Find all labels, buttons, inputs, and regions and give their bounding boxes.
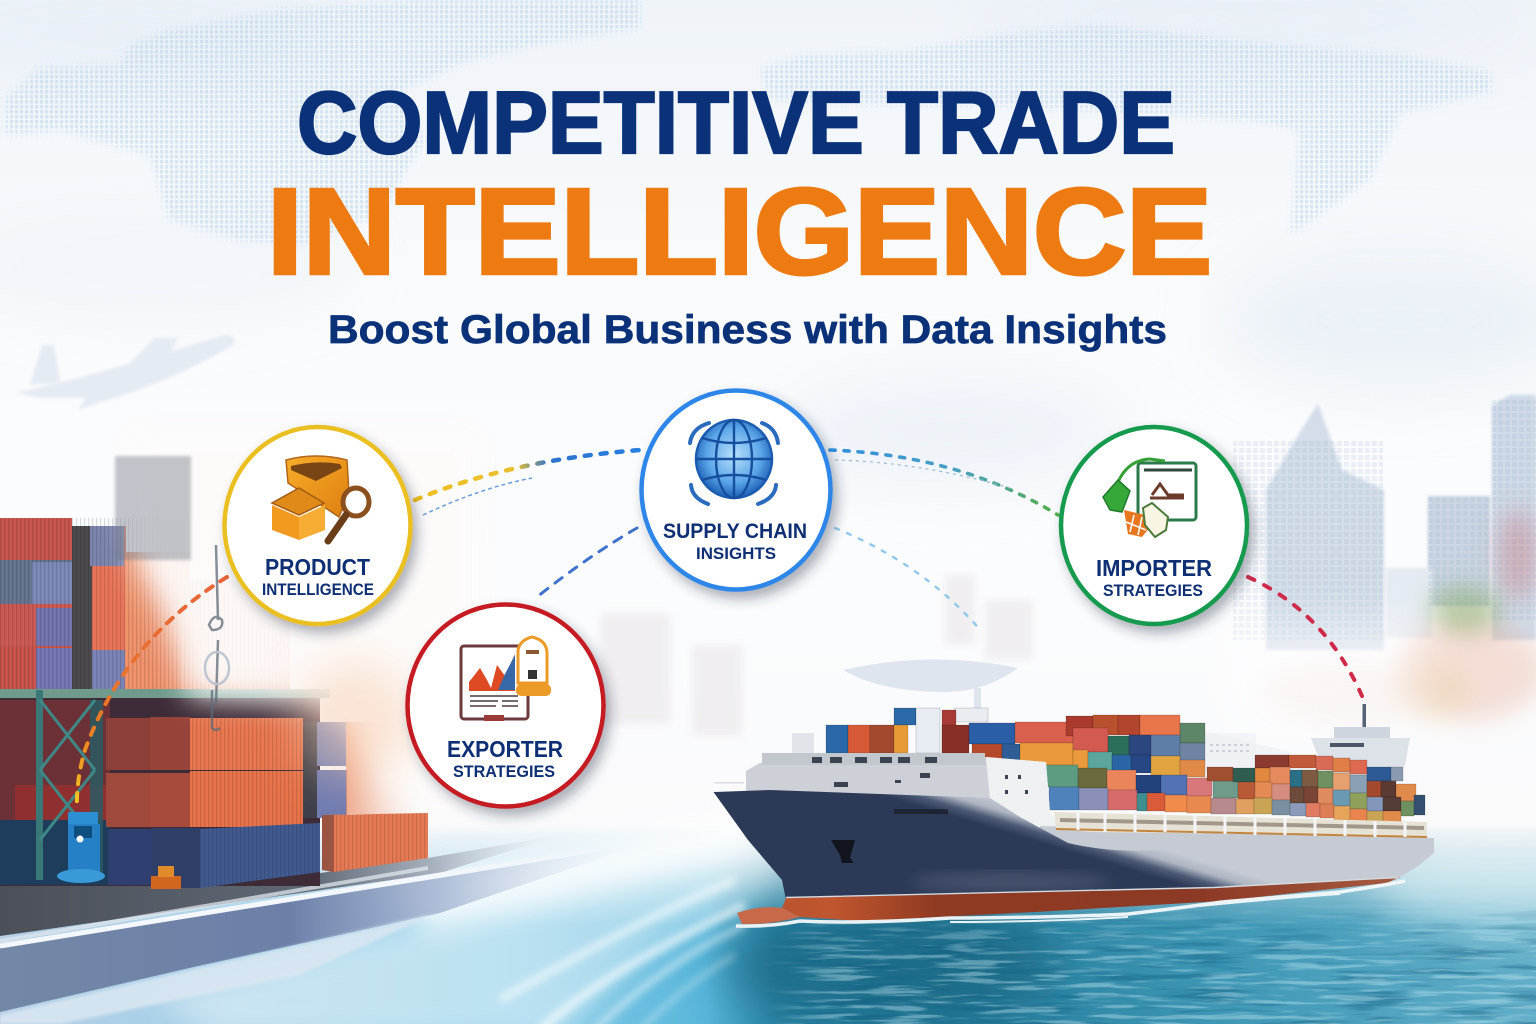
label: strategies: STRATEGIES [1103, 581, 1203, 600]
panel: supply chain insights [642, 390, 830, 590]
red boot topping [782, 877, 1400, 921]
grey hull [1040, 826, 1434, 893]
bulbous bow [737, 907, 800, 924]
radar dish ghost above ship [843, 659, 1018, 710]
deep water shadow [720, 907, 1060, 1023]
right water glow [1370, 832, 1536, 928]
cargo ship [714, 704, 1434, 926]
container stacks amidships [826, 708, 1238, 814]
small orange vehicle [151, 866, 181, 889]
lower yard shadow and gantry [0, 689, 330, 886]
bow details [831, 809, 948, 863]
label: insights: INSIGHTS [696, 544, 776, 563]
title [267, 73, 1212, 352]
right city skyline [1220, 395, 1536, 730]
ground orange container [322, 813, 428, 872]
water surface [0, 815, 1536, 1024]
wet quay road [0, 835, 640, 1024]
hanging crane hook [205, 545, 229, 730]
icon: boxes and magnifier [272, 456, 369, 541]
connector: supply chain to ship, faint [835, 528, 982, 632]
upper container stacks [0, 518, 290, 690]
wake streaks [500, 880, 745, 1024]
title line 2: INTELLIGENCE [267, 164, 1212, 300]
label: supply chain: SUPPLY CHAIN [663, 520, 807, 543]
label: product: PRODUCT [265, 554, 370, 580]
dotted world map [2, 0, 1493, 247]
panel: importer strategies [1061, 427, 1247, 624]
airplane silhouette [16, 336, 234, 410]
distant tower behind stacks [115, 456, 191, 560]
title line 1: COMPETITIVE TRADE [297, 73, 1175, 172]
hull bow sheen [910, 874, 1110, 890]
connector: importer to ship [1248, 577, 1362, 696]
water ripples [776, 906, 1536, 1024]
icon: handshake and document [1103, 459, 1196, 537]
blue containers [108, 823, 320, 888]
port container yard [0, 430, 480, 889]
bow wave foam [736, 881, 1405, 926]
connector: supply chain to importer [830, 450, 1058, 515]
white wake haze [150, 815, 790, 1024]
label: importer: IMPORTER [1096, 555, 1212, 581]
label: exporter: EXPORTER [447, 736, 563, 762]
connector: supply chain to exporter [537, 528, 637, 597]
warm haze [295, 660, 415, 780]
deck railing [1054, 810, 1427, 837]
stern bridge tower [1311, 704, 1410, 790]
blue port machine [57, 812, 105, 883]
side containers [303, 722, 420, 818]
fog over upper yard [125, 430, 480, 812]
subtitle: Boost Global Business with Data Insights [328, 308, 1167, 352]
icon: globe with arrows [690, 420, 778, 504]
central faded buildings [600, 575, 1033, 735]
label: strategies: STRATEGIES [453, 762, 555, 781]
panel: product intelligence [224, 427, 410, 624]
dark hull [714, 790, 1310, 900]
soft clouds [0, 0, 1536, 480]
connector: product to port [77, 577, 227, 810]
label: intelligence: INTELLIGENCE [262, 580, 374, 599]
white superstructure [714, 733, 1100, 848]
orange containers [106, 717, 303, 827]
container stacks aft [1207, 755, 1425, 822]
panel: exporter strategies [408, 604, 604, 806]
icon: tablet with chart and tag [461, 637, 551, 721]
connector: product to supply chain [415, 450, 640, 515]
white accommodation behind stack [1200, 730, 1290, 772]
